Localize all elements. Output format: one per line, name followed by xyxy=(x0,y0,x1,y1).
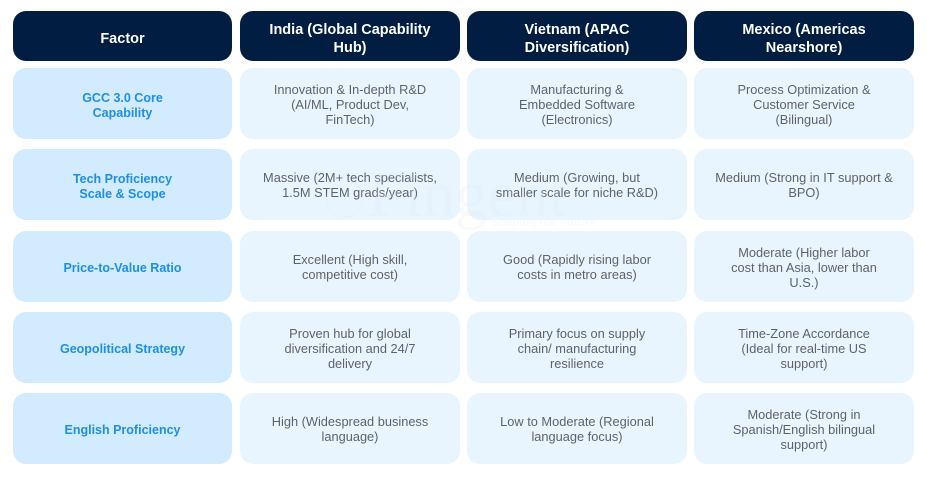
Vietnam: price to value: Good (Rapidly rising labor xyxy=(503,252,651,267)
Mexico: tech proficiency: BPO) xyxy=(788,185,820,200)
India: geopolitical strategy: diversification and 24/7 xyxy=(285,340,415,356)
India: geopolitical strategy xyxy=(240,312,460,383)
India: geopolitical strategy: delivery xyxy=(328,356,372,370)
watermark: logo ring xyxy=(326,180,364,218)
Mexico: geopolitical strategy: support) xyxy=(781,356,827,370)
factor: Tech Proficiency Scale & Scope: Tech Proficiency xyxy=(73,172,172,186)
Vietnam: geopolitical strategy xyxy=(467,312,687,383)
Mexico: English proficiency xyxy=(694,393,914,464)
India: tech proficiency: 1.5M STEM grads/year) xyxy=(282,185,418,200)
factor: English Proficiency xyxy=(13,393,232,464)
Mexico: core capability: (Bilingual) xyxy=(776,112,832,126)
Mexico: English proficiency: Spanish/English bilingual xyxy=(733,422,875,436)
factor: Geopolitical Strategy xyxy=(13,312,232,383)
header: India xyxy=(240,11,460,61)
Mexico: tech proficiency: Medium (Strong in IT support & xyxy=(715,170,893,185)
Vietnam: tech proficiency: Medium (Growing, but xyxy=(514,170,640,185)
header: India: India (Global Capability xyxy=(269,22,431,38)
Vietnam: core capability: (Electronics) xyxy=(541,112,613,126)
factor: Tech Proficiency Scale & Scope: Scale & Scope xyxy=(79,186,166,200)
factor: Price-to-Value Ratio: Price-to-Value Ratio xyxy=(63,261,182,275)
India: English proficiency xyxy=(240,393,460,464)
India: geopolitical strategy: Proven hub for global xyxy=(289,326,411,340)
Mexico: geopolitical strategy: (Ideal for real-time US xyxy=(741,340,867,356)
India: core capability: FinTech) xyxy=(325,112,375,126)
factor: Geopolitical Strategy: Geopolitical Strategy xyxy=(60,342,185,356)
factor: GCC 3.0 Core Capability xyxy=(13,68,232,139)
factor: Tech Proficiency Scale & Scope xyxy=(13,149,232,220)
header: Mexico: Mexico (Americas xyxy=(742,22,866,38)
Vietnam: tech proficiency: smaller scale for niche R&D) xyxy=(496,185,658,200)
Vietnam: English proficiency: Low to Moderate (Regional xyxy=(500,414,654,429)
India: core capability: (AI/ML, Product Dev, xyxy=(291,96,409,112)
Vietnam: English proficiency: language focus) xyxy=(531,429,623,444)
factor: Price-to-Value Ratio xyxy=(13,231,232,302)
India: tech proficiency xyxy=(240,149,460,220)
watermark: tagline: Shaping the Future xyxy=(491,217,596,229)
Mexico: geopolitical strategy xyxy=(694,312,914,383)
Mexico: core capability xyxy=(694,68,914,139)
India: price to value: competitive cost) xyxy=(302,267,398,282)
Vietnam: core capability xyxy=(467,68,687,139)
Vietnam: geopolitical strategy: chain/ manufacturing xyxy=(518,340,636,356)
Mexico: price to value xyxy=(694,231,914,302)
header: Factor: Factor xyxy=(100,30,145,46)
Mexico: English proficiency: Moderate (Strong in xyxy=(747,406,861,422)
header: Vietnam: Diversification) xyxy=(525,40,629,56)
Vietnam: geopolitical strategy: Primary focus on supply xyxy=(509,326,645,340)
India: price to value xyxy=(240,231,460,302)
factor: GCC 3.0 Core Capability: GCC 3.0 Core xyxy=(82,90,163,104)
India: tech proficiency: Massive (2M+ tech specialists, xyxy=(263,170,437,185)
Vietnam: English proficiency xyxy=(467,393,687,464)
Mexico: price to value: cost than Asia, lower than xyxy=(731,260,877,274)
India: core capability xyxy=(240,68,460,139)
factor: English Proficiency: English Proficiency xyxy=(64,423,180,437)
Vietnam: price to value: costs in metro areas) xyxy=(517,267,637,282)
header: Vietnam xyxy=(467,11,687,61)
header: Mexico xyxy=(694,11,914,61)
watermark: Fingent: Fingent xyxy=(368,159,567,231)
Mexico: price to value: U.S.) xyxy=(789,274,819,290)
India: core capability: Innovation & In-depth R&D xyxy=(274,82,426,96)
Mexico: core capability: Process Optimization & xyxy=(738,82,870,96)
header: India: Hub) xyxy=(333,40,366,56)
Mexico: English proficiency: support) xyxy=(781,436,827,452)
Mexico: core capability: Customer Service xyxy=(753,96,855,112)
India: price to value: Excellent (High skill, xyxy=(293,252,407,267)
Vietnam: price to value xyxy=(467,231,687,302)
India: English proficiency: language) xyxy=(322,429,378,444)
header: Factor xyxy=(13,11,232,61)
Mexico: geopolitical strategy: Time-Zone Accordance xyxy=(738,326,870,340)
Vietnam: core capability: Manufacturing & xyxy=(530,82,624,96)
header: Vietnam: Vietnam (APAC xyxy=(524,22,630,38)
Mexico: price to value: Moderate (Higher labor xyxy=(738,244,870,260)
Vietnam: tech proficiency xyxy=(467,149,687,220)
factor: GCC 3.0 Core Capability: Capability xyxy=(93,106,152,120)
Mexico: tech proficiency xyxy=(694,149,914,220)
Vietnam: core capability: Embedded Software xyxy=(519,96,635,112)
Vietnam: geopolitical strategy: resilience xyxy=(550,356,604,370)
India: English proficiency: High (Widespread business xyxy=(272,414,428,429)
header: Mexico: Nearshore) xyxy=(766,40,842,56)
